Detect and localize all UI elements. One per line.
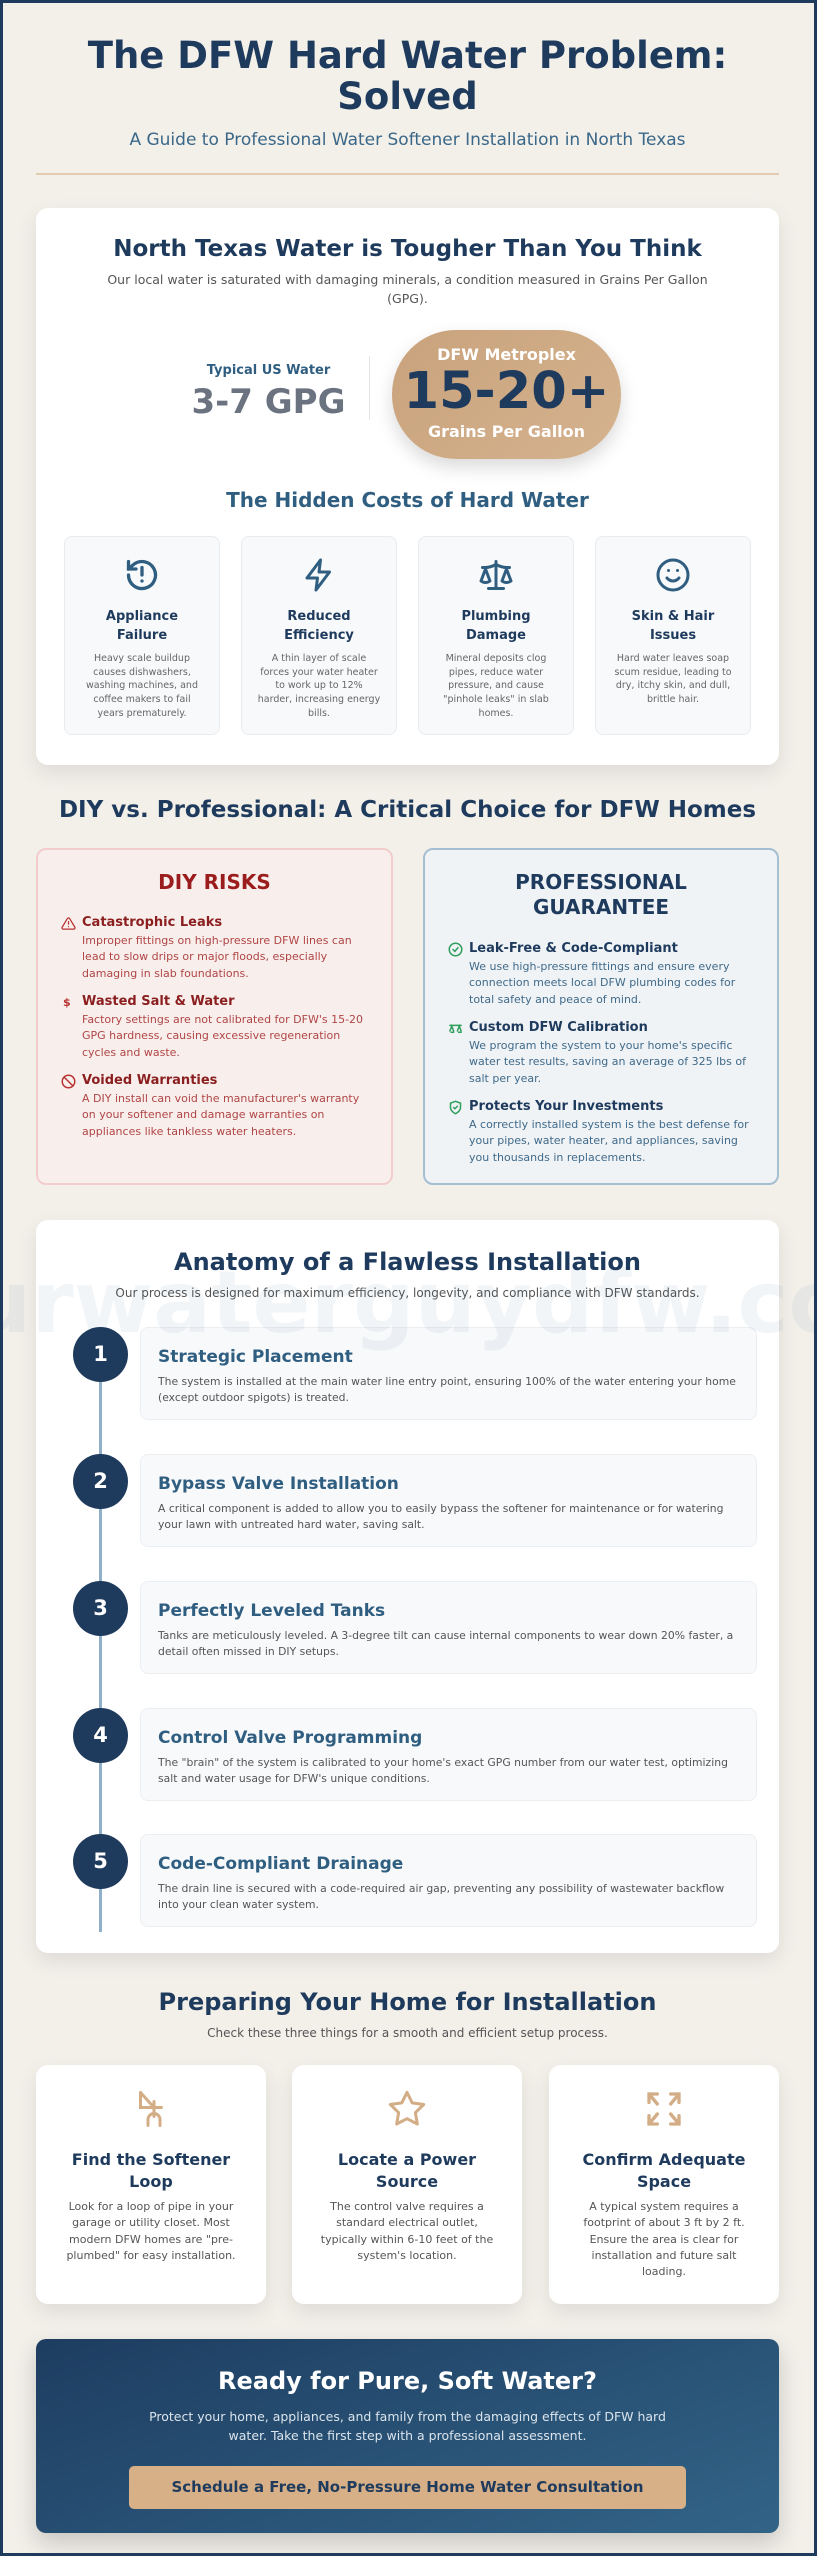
prep: softener loop: Loop	[129, 2172, 173, 2191]
heading: PROFESSIONAL	[515, 870, 687, 894]
risk: warranties: Voided Warranties	[82, 1073, 217, 1088]
stat: typical US: Typical US Water	[207, 363, 330, 378]
panel: anatomy of installation	[36, 1220, 779, 1953]
panel: anatomy of installation: 3	[93, 1596, 108, 1620]
cost: skin hair	[595, 536, 751, 735]
heading: North Texas Water is Tougher Than You Think	[113, 236, 702, 262]
description: Our local water is saturated with damaging minerals, a condition measured in Grains Per Gallon (GPG).	[107, 272, 708, 306]
prep: adequate space: Space	[637, 2172, 691, 2191]
benefit: leak free: We use high-pressure fittings and ensure every connection meets local DFW plumbing codes for total safety and peace of mind.	[469, 960, 735, 1006]
CTA panel	[36, 2339, 779, 2533]
prep cards	[33, 2065, 782, 2315]
CTA button	[129, 2466, 686, 2509]
prep: softener loop: Find the Softener	[72, 2150, 230, 2169]
cost: skin hair: Issues	[650, 628, 696, 643]
panel: north texas water	[36, 208, 779, 765]
risk: leaks: Improper fittings on high-pressure DFW lines can lead to slow drips or major floods, especially damaging in slab foundations.	[82, 934, 352, 980]
step 4	[73, 1708, 757, 1801]
panel: anatomy of installation: 2	[93, 1469, 108, 1493]
header	[88, 34, 727, 150]
panel: anatomy of installation: Perfectly Leveled Tanks	[158, 1601, 385, 1621]
stat: DFW pill: DFW Metroplex	[437, 345, 576, 364]
cost: appliance failure: Heavy scale buildup causes dishwashers, washing machines, and coffee makers to fail years prematurely.	[86, 653, 198, 719]
CTA heading: Ready for Pure, Soft Water?	[218, 2367, 597, 2395]
panel: DIY risks	[36, 848, 393, 1185]
stat: DFW pill	[392, 330, 621, 459]
prep: adequate space	[549, 2065, 779, 2304]
subheading hidden costs: The Hidden Costs of Hard Water	[226, 488, 589, 512]
risk: warranties: A DIY install can void the manufacturer's warranty on your softener and damage warranties on appliances like tankless water heaters.	[82, 1092, 359, 1138]
panel: anatomy of installation: The "brain" of the system is calibrated to your home's exact GPG number from our water test, optimizing salt and water usage for DFW's unique conditions.	[158, 1756, 728, 1785]
prep: power source: Source	[376, 2172, 438, 2191]
title	[88, 34, 727, 118]
cost: reduced efficiency: Reduced	[287, 609, 351, 624]
step 3	[73, 1581, 757, 1674]
benefit: calibration: Custom DFW Calibration	[469, 1020, 648, 1035]
risk: leaks: Catastrophic Leaks	[82, 915, 222, 930]
cost: appliance failure: Appliance	[106, 609, 178, 624]
risk: wasted salt: Wasted Salt & Water	[82, 994, 235, 1009]
prep: adequate space: A typical system requires a footprint of about 3 ft by 2 ft. Ensure the area is clear for installation and future salt loading.	[583, 2200, 745, 2278]
panel: anatomy of installation: Code-Compliant Drainage	[158, 1854, 403, 1874]
stat: DFW pill: 15-20+	[404, 362, 609, 421]
benefit: investments	[450, 1099, 749, 1164]
cost: appliance failure	[64, 536, 220, 735]
benefit: leak free: Leak-Free & Code-Compliant	[469, 941, 678, 956]
CTA button: Schedule a Free, No-Pressure Home Water Consultation	[171, 2478, 644, 2496]
cost: skin hair: Hard water leaves soap scum residue, leading to dry, itchy skin, and dull, brittle hair.	[614, 653, 732, 705]
risk: wasted salt	[63, 994, 363, 1059]
step 2	[73, 1454, 757, 1547]
panel: anatomy of installation: The drain line is secured with a code-required air gap, preventing any possibility of wastewater backflow into your clean water system.	[158, 1882, 724, 1911]
title: The DFW Hard Water Problem:	[88, 34, 727, 77]
cost: plumbing damage: Damage	[466, 628, 526, 643]
heading: preparing your home	[159, 1988, 656, 2040]
benefit: calibration	[449, 1020, 746, 1085]
benefit: investments: Protects Your Investments	[469, 1099, 663, 1114]
CTA text: Protect your home, appliances, and family from the damaging effects of DFW hard water. Take the first step with a professional assessment.	[149, 2409, 666, 2443]
heading: preparing your home: Check these three things for a smooth and efficient setup process.	[207, 2026, 608, 2040]
timeline line	[99, 1350, 102, 1932]
heading: DIY RISKS	[158, 870, 271, 894]
cost: reduced efficiency: Efficiency	[284, 628, 354, 643]
step 5	[73, 1834, 757, 1927]
risk: wasted salt: $	[63, 996, 71, 1009]
panel: anatomy of installation: Tanks are meticulously leveled. A 3-degree tilt can cause internal components to wear down 20% faster, a detail often missed in DIY setups.	[158, 1629, 733, 1658]
title: Solved	[337, 75, 478, 118]
panel: anatomy of installation: 4	[93, 1723, 108, 1747]
subtitle: A Guide to Professional Water Softener Installation in North Texas	[129, 130, 686, 150]
heading: Anatomy of a Flawless Installation	[174, 1248, 641, 1276]
cost: plumbing damage: Plumbing	[461, 609, 531, 624]
cost: appliance failure: Failure	[117, 628, 167, 643]
cost: reduced efficiency	[241, 536, 397, 735]
cost: plumbing damage: Mineral deposits clog pipes, reduce water pressure, and cause "pinhole leaks" in slab homes.	[443, 653, 549, 719]
panel: professional guarantee	[423, 848, 779, 1185]
panel: anatomy of installation: A critical component is added to allow you to easily bypass the softener for maintenance or for watering your lawn with untreated hard water, saving salt.	[158, 1502, 724, 1531]
benefit: calibration: We program the system to your home's specific water test results, saving an average of 325 lbs of salt per year.	[469, 1039, 746, 1085]
panel: anatomy of installation: The system is installed at the main water line entry point, ensuring 100% of the water entering your home (except outdoor spigots) is treated.	[158, 1375, 736, 1404]
heading: preparing your home: Preparing Your Home for Installation	[159, 1988, 656, 2016]
prep: power source: The control valve requires a standard electrical outlet, typically within 6-10 feet of the system's location.	[321, 2200, 493, 2262]
cost: plumbing damage	[418, 536, 574, 735]
panel: anatomy of installation: 5	[93, 1849, 108, 1873]
panel: anatomy of installation: Strategic Placement	[158, 1347, 353, 1367]
benefit: leak free	[448, 941, 736, 1006]
cost: skin hair: Skin & Hair	[632, 609, 714, 624]
heading: DIY vs professional: DIY vs. Professional: A Critical Choice for DFW Homes	[59, 797, 756, 823]
subheading: Our process is designed for maximum efficiency, longevity, and compliance with DFW standards.	[115, 1286, 700, 1300]
prep: softener loop: Look for a loop of pipe in your garage or utility closet. Most modern DFW homes are "pre-plumbed" for easy installation.	[66, 2200, 236, 2262]
prep: softener loop	[36, 2065, 266, 2304]
heading: GUARANTEE	[533, 895, 669, 919]
panel: anatomy of installation: Bypass Valve Installation	[158, 1474, 399, 1494]
prep: adequate space: Confirm Adequate	[583, 2150, 745, 2169]
risk: wasted salt: Factory settings are not calibrated for DFW's 15-20 GPG hardness, causing excessive regeneration cycles and waste.	[82, 1013, 363, 1059]
panel: anatomy of installation: Control Valve Programming	[158, 1728, 422, 1748]
risk: warranties	[62, 1073, 359, 1138]
stat: typical US	[192, 363, 346, 422]
cost: reduced efficiency: A thin layer of scale forces your water heater to work up to 12% harder, increasing energy bills.	[258, 653, 380, 719]
stat: DFW pill: Grains Per Gallon	[428, 422, 585, 441]
stat: typical US: 3-7 GPG	[192, 382, 346, 422]
step 1	[73, 1327, 757, 1420]
prep: power source	[292, 2065, 522, 2304]
heading	[515, 870, 687, 919]
prep: power source: Locate a Power	[338, 2150, 476, 2169]
panel: anatomy of installation: 1	[93, 1342, 108, 1366]
benefit: investments: A correctly installed system is the best defense for your pipes, water heater, and appliances, saving you thousands in replacements.	[469, 1118, 749, 1164]
risk: leaks	[61, 915, 352, 980]
